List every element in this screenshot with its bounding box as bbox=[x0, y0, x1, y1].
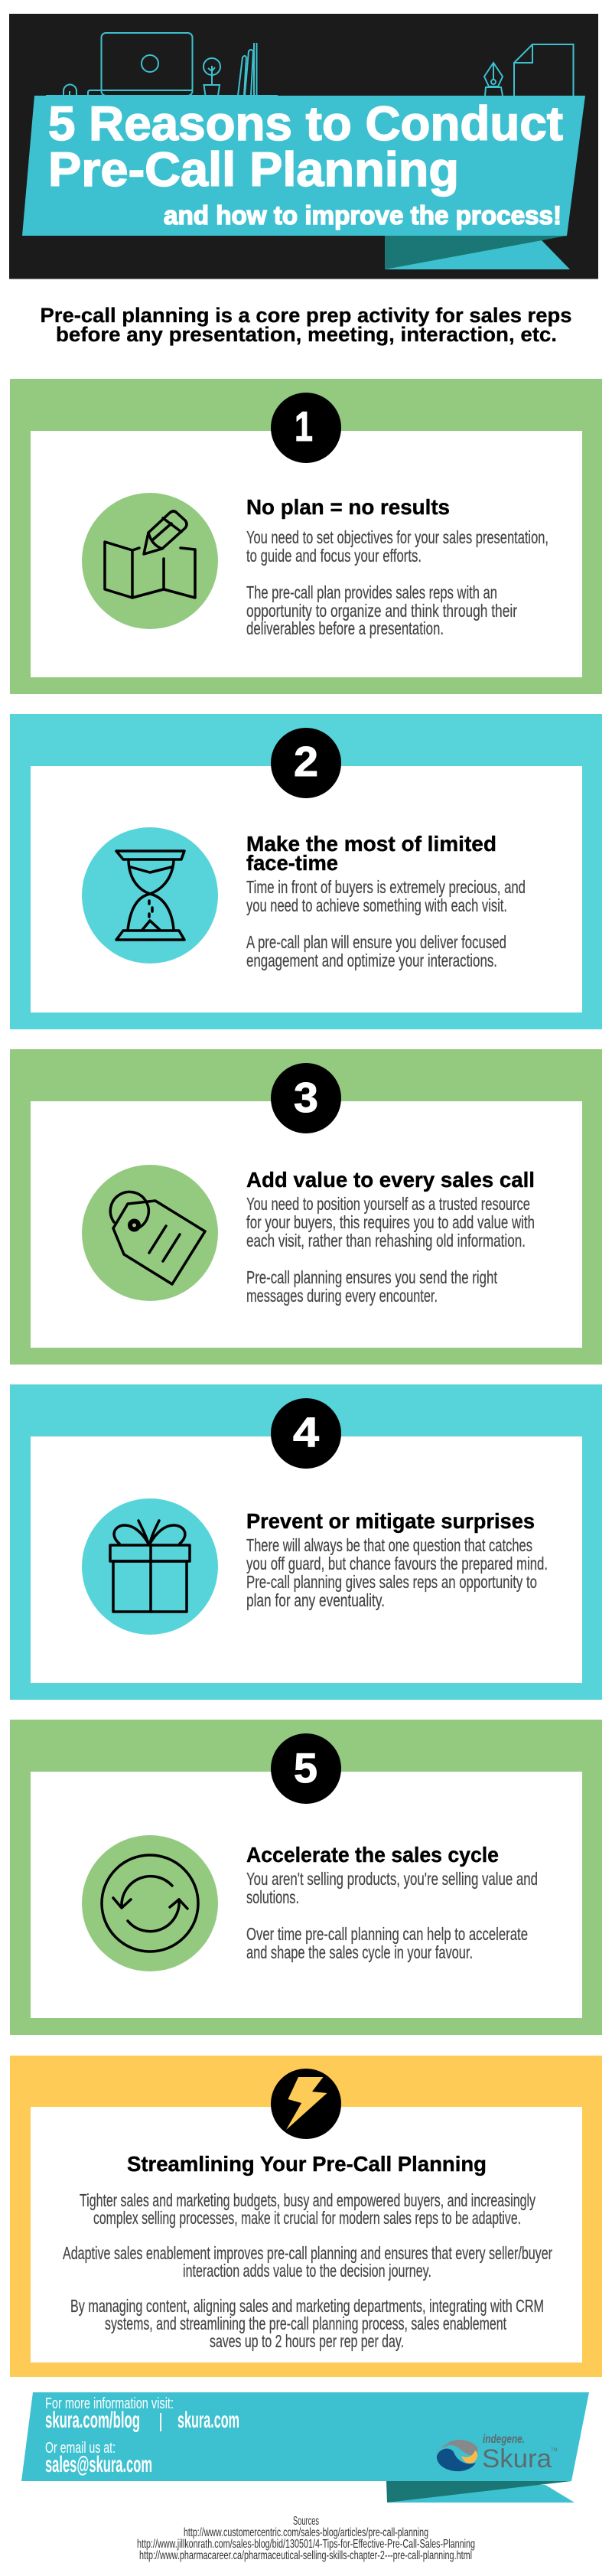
icon: lightning bolt badge bbox=[271, 2069, 341, 2139]
body text: solutions. bbox=[246, 1887, 299, 1907]
heading: Streamlining Your Pre-Call Planning bbox=[127, 2152, 487, 2176]
heading: Prevent or mitigate surprises bbox=[246, 1509, 535, 1533]
number badge 1 bbox=[271, 393, 341, 463]
body text: opportunity to organize and think through their bbox=[246, 601, 517, 621]
banner ribbon bbox=[22, 96, 585, 269]
panel: reason 4 bbox=[10, 1384, 602, 1700]
number badge 4 bbox=[271, 1398, 341, 1469]
icon: price tag bbox=[82, 1165, 218, 1301]
heading: No plan = no results bbox=[246, 495, 450, 519]
heading bbox=[246, 832, 496, 875]
body text bbox=[246, 877, 526, 970]
title: 5 Reasons to Conduct bbox=[48, 97, 563, 151]
contact text: skura.com/blog bbox=[45, 2408, 140, 2433]
body text: deliverables before a presentation. bbox=[246, 618, 444, 638]
header bbox=[9, 14, 598, 279]
body text: interaction adds value to the decision journey. bbox=[183, 2261, 431, 2281]
number badge 1: 1 bbox=[295, 403, 313, 450]
body text bbox=[246, 1535, 548, 1610]
body text bbox=[63, 2190, 552, 2351]
sources bbox=[137, 2515, 475, 2562]
intro text: Pre-call planning is a core prep activity for sales reps bbox=[40, 304, 572, 327]
body text: A pre-call plan will ensure you deliver focused bbox=[246, 932, 506, 952]
number badge 3 bbox=[271, 1063, 341, 1133]
number badge 2 bbox=[271, 728, 341, 798]
contact text: For more information visit: bbox=[45, 2395, 174, 2412]
body text: engagement and optimize your interactions. bbox=[246, 951, 497, 970]
contact text: sales@skura.com bbox=[45, 2452, 152, 2477]
number badge 2: 2 bbox=[294, 738, 318, 785]
body text bbox=[246, 1194, 535, 1306]
body text: Pre-call planning ensures you send the right bbox=[246, 1267, 497, 1287]
panel: reason 1 bbox=[10, 379, 602, 694]
header background bbox=[9, 14, 598, 279]
icon: cycle arrows bbox=[82, 1835, 218, 1971]
logo: indegene Skura: Skura bbox=[482, 2444, 552, 2473]
body text: saves up to 2 hours per rep per day. bbox=[210, 2331, 404, 2351]
body text: messages during every encounter. bbox=[246, 1286, 438, 1306]
logo: indegene Skura: indegene. bbox=[483, 2433, 525, 2446]
heading: face-time bbox=[246, 851, 338, 875]
contact text: skura.com bbox=[177, 2408, 239, 2433]
sources: Sources bbox=[293, 2515, 319, 2528]
body text bbox=[246, 1869, 538, 1962]
number badge 5: 5 bbox=[294, 1744, 317, 1792]
intro text bbox=[40, 304, 572, 346]
number badge 4: 4 bbox=[293, 1408, 319, 1456]
icon: map and pencil bbox=[82, 493, 218, 629]
panel: reason 2 bbox=[10, 714, 602, 1029]
logo: indegene Skura: TM bbox=[551, 2448, 558, 2453]
heading: Make the most of limited bbox=[246, 832, 496, 856]
icon: hourglass bbox=[82, 827, 218, 964]
number badge 5 bbox=[271, 1733, 341, 1804]
icons: desk line art bbox=[46, 33, 574, 96]
panel: reason 3 bbox=[10, 1049, 602, 1365]
heading: Add value to every sales call bbox=[246, 1168, 535, 1192]
body text: and shape the sales cycle in your favour. bbox=[246, 1942, 473, 1962]
body text: The pre-call plan provides sales reps with an bbox=[246, 582, 497, 602]
body text: each visit, rather than rehashing old information. bbox=[246, 1231, 526, 1251]
body text bbox=[246, 527, 549, 638]
title bbox=[48, 97, 563, 230]
heading: Accelerate the sales cycle bbox=[246, 1843, 499, 1867]
contact text: Or email us at: bbox=[45, 2440, 116, 2457]
body text: to guide and focus your efforts. bbox=[246, 546, 422, 566]
panel: streamlining bbox=[10, 2056, 602, 2377]
intro text: before any presentation, meeting, interaction, etc. bbox=[56, 323, 557, 346]
panel: reason 5 bbox=[10, 1720, 602, 2035]
footer banner bbox=[21, 2392, 589, 2503]
body text: you need to achieve something with each visit. bbox=[246, 895, 507, 915]
sources: http://www.customercentric.com/sales-blog/articles/pre-call-planning bbox=[184, 2526, 428, 2539]
contact text bbox=[45, 2395, 239, 2477]
title: Pre-Call Planning bbox=[48, 143, 459, 197]
body text: plan for any eventuality. bbox=[246, 1590, 385, 1610]
logo: indegene Skura bbox=[436, 2433, 558, 2473]
icon: gift box bbox=[82, 1498, 218, 1635]
title: and how to improve the process! bbox=[164, 201, 562, 230]
number badge 3: 3 bbox=[294, 1074, 318, 1121]
